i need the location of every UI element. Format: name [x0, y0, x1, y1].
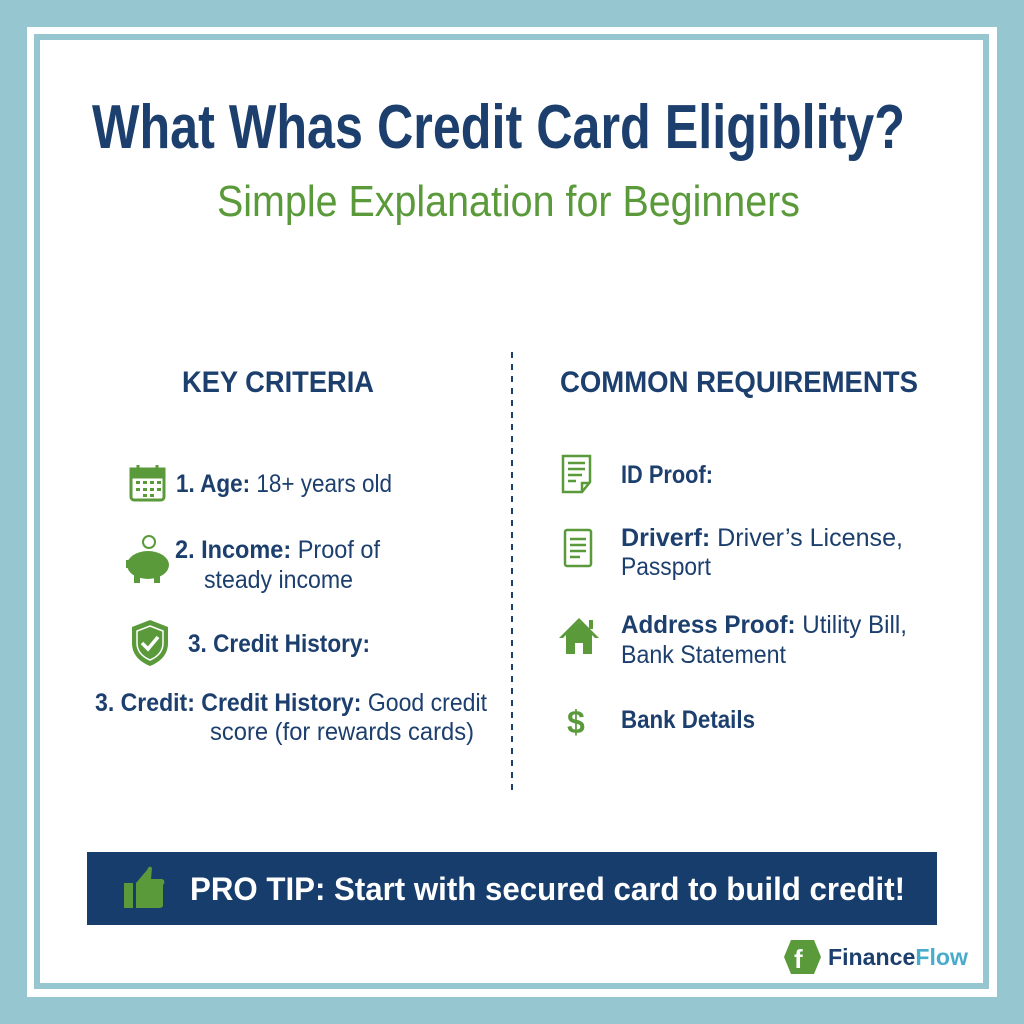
item: driver: Driverf: Driver’s License, — [621, 524, 903, 552]
panel: key criteria — [95, 366, 487, 746]
icon: shield — [132, 620, 168, 666]
logo: financeflow — [784, 940, 968, 974]
icon: dollar: $ — [567, 704, 585, 740]
item: age: 1. Age: 18+ years old — [176, 470, 392, 498]
item: address proof: Address Proof: Utility Bill, — [621, 611, 907, 639]
icon: document — [563, 456, 590, 492]
panel: common requirements: Bank Statement — [621, 641, 786, 669]
item: income: 2. Income: Proof of — [175, 536, 380, 564]
item: credit score: 3. Credit: Credit History: Good credit — [95, 689, 487, 717]
icon: document 2 — [565, 530, 591, 566]
panel: common requirements — [559, 366, 918, 740]
logo: financeflow: f — [794, 944, 803, 974]
item: credit history: 3. Credit History: — [188, 630, 370, 658]
heading: common requirements: COMMON REQUIREMENTS — [560, 366, 918, 399]
icon: calendar — [131, 465, 164, 500]
subtitle: Simple Explanation for Beginners — [217, 177, 800, 226]
icon: piggy bank — [126, 536, 169, 583]
item: bank details: Bank Details — [621, 706, 755, 734]
banner text: PRO TIP: Start with secured card to build credit! — [190, 871, 905, 907]
logo: financeflow: FinanceFlow — [828, 944, 968, 970]
divider — [511, 352, 513, 795]
panel: key criteria: score (for rewards cards) — [210, 718, 474, 746]
panel: common requirements: Passport — [621, 553, 711, 581]
item: id proof: ID Proof: — [621, 461, 713, 489]
icon: thumbs up — [124, 867, 164, 908]
heading: key criteria: KEY CRITERIA — [182, 366, 374, 399]
banner: pro tip — [87, 852, 937, 925]
icon: house — [559, 618, 599, 654]
panel: key criteria: steady income — [204, 566, 353, 594]
